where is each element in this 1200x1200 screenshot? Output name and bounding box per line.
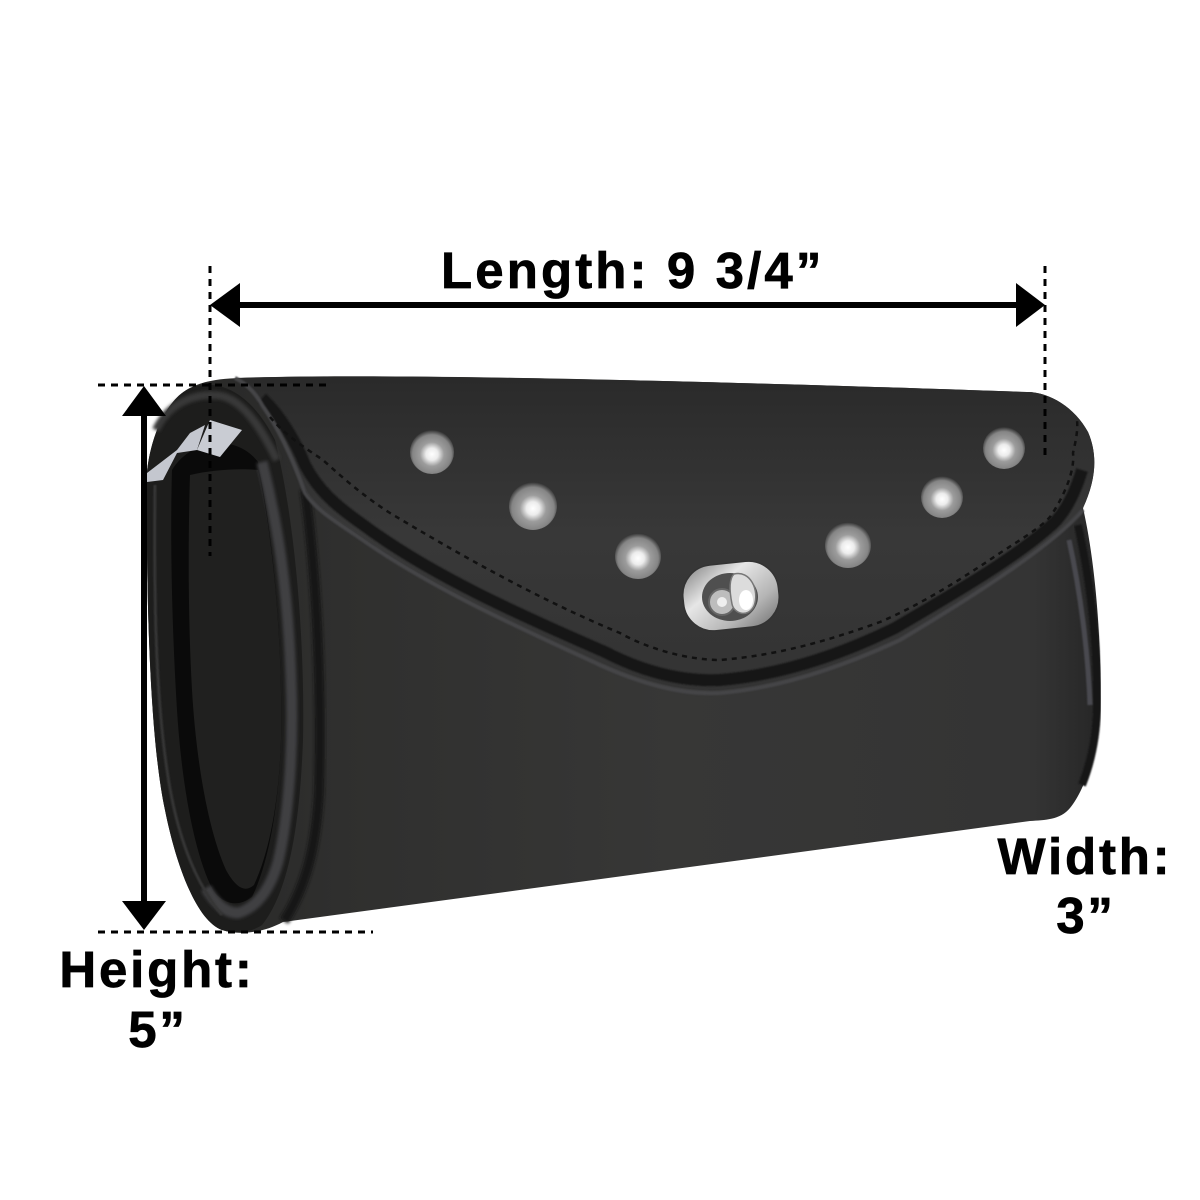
flap dark band — [262, 398, 1082, 680]
studs — [410, 427, 1025, 579]
flap fold piping — [156, 395, 277, 460]
flap — [235, 376, 1094, 690]
label: height — [59, 941, 255, 1058]
dotted guide lines — [98, 266, 1045, 932]
body right trim — [1069, 525, 1097, 785]
label: width — [998, 828, 1172, 944]
label: height: Height: — [59, 941, 255, 998]
arrow: length — [210, 283, 1045, 327]
arrow: height — [122, 386, 166, 930]
label tag — [147, 420, 242, 482]
bag body — [147, 376, 1100, 933]
flap stitching — [270, 417, 1077, 660]
bag — [147, 376, 1100, 933]
seam dark line — [284, 490, 320, 921]
label: width: 3” — [1056, 887, 1116, 944]
rim light trim — [206, 462, 292, 913]
inner dark strip — [171, 443, 281, 903]
left rim of opening — [147, 385, 303, 932]
twist lock — [680, 558, 782, 634]
inner lining — [189, 469, 281, 889]
rim outer highlight — [155, 485, 222, 915]
flap piping edge — [235, 378, 1083, 693]
label: length: Length: 9 3/4” — [441, 242, 824, 299]
label: height: 5” — [128, 1001, 188, 1058]
label: width: Width: — [998, 828, 1172, 885]
